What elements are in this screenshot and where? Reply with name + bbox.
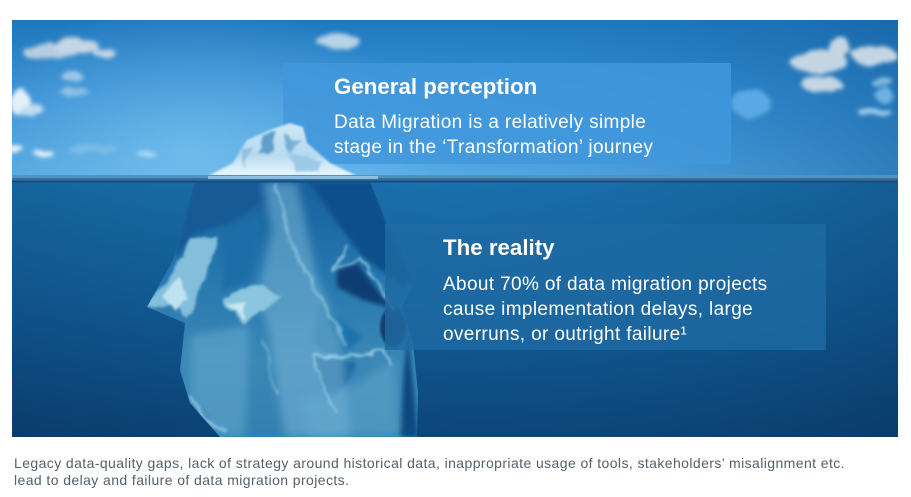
- text: the reality body: About 70% of data migration projects: [443, 274, 768, 295]
- heading: the reality: The reality: [443, 235, 555, 260]
- caption: Legacy data-quality gaps, lack of strategy around historical data, inappropriate usage of tools, stakeholders’ misalignment etc.: [14, 455, 845, 471]
- panel: the reality background: [385, 224, 826, 350]
- heading: general perception: General perception: [334, 74, 537, 99]
- caption: lead to delay and failure of data migration projects.: [14, 472, 349, 488]
- iceberg underwater: [147, 182, 418, 437]
- text: the reality body: cause implementation delays, large: [443, 299, 753, 320]
- clouds: [10, 35, 898, 156]
- text: general perception body: stage in the ‘Transformation’ journey: [334, 137, 653, 158]
- text: the reality body: [443, 274, 768, 345]
- text: general perception body: [334, 112, 653, 158]
- sky: [12, 20, 898, 177]
- iceberg tip: [208, 123, 357, 176]
- panel: general perception background: [283, 63, 731, 164]
- caption: [14, 455, 845, 488]
- horizon band: [12, 175, 898, 182]
- text: general perception body: Data Migration is a relatively simple: [334, 112, 646, 133]
- sea: [12, 180, 898, 438]
- text: the reality body: overruns, or outright failure¹: [443, 324, 687, 345]
